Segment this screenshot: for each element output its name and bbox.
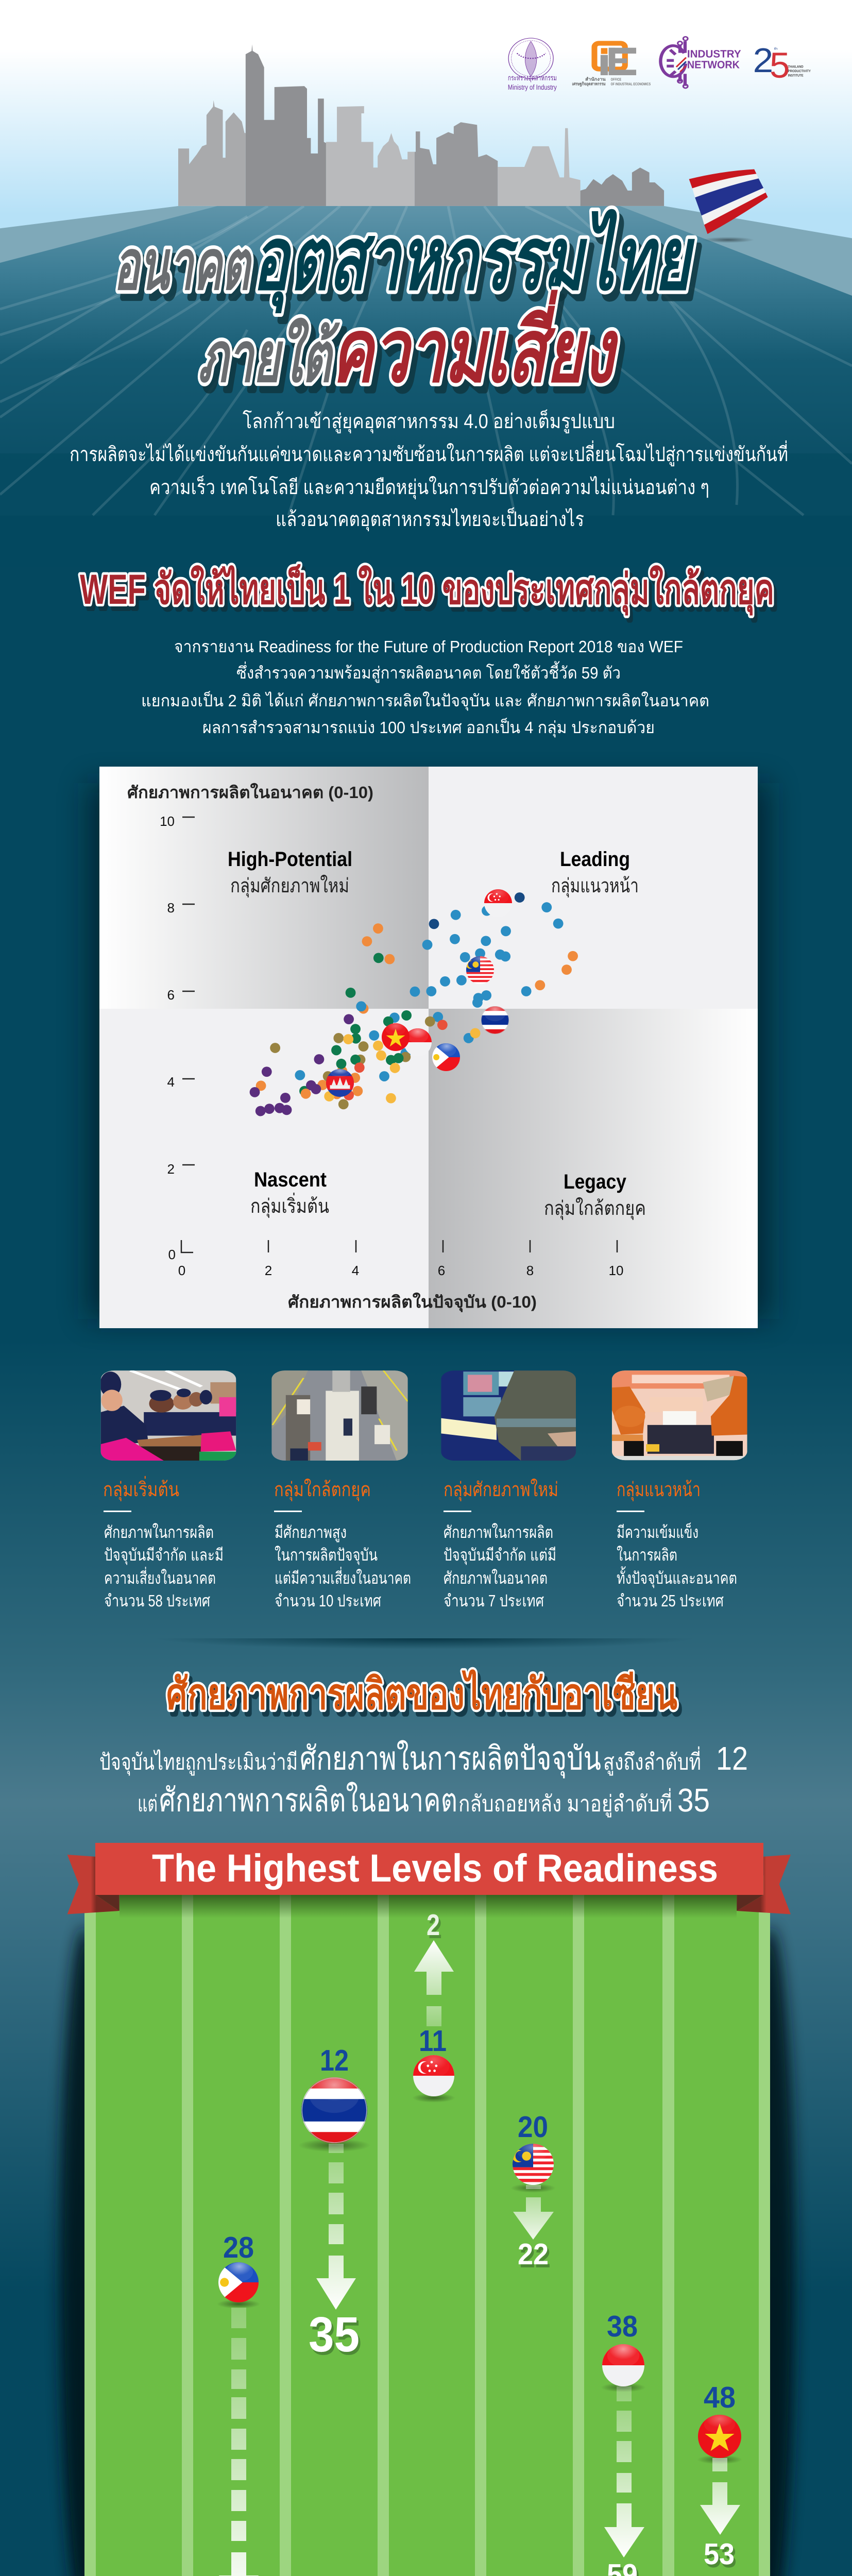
logo: Ministry of Industry seal <box>508 38 553 79</box>
quadrant label: Leading <box>551 848 639 897</box>
logos row: INDUSTRY <box>687 48 741 60</box>
title line 2: ภายใต้ <box>198 317 340 396</box>
flag: Malaysia on chart <box>466 956 494 984</box>
logos row: NETWORK <box>687 59 740 71</box>
logos row: สำนักงาน <box>585 77 606 82</box>
y axis ticks <box>160 814 195 1262</box>
WEF description text: แยกมองเป็น 2 มิติ ได้แก่ ศักยภาพการผลิตในปัจจุบัน และ ศักยภาพการผลิตในอนาคต <box>141 691 709 711</box>
Vietnam rank arrow <box>697 2381 742 2571</box>
group: leading: ทั้งปัจจุบันและอนาคต <box>617 1566 737 1588</box>
group: legacy <box>274 1478 411 1610</box>
y axis ticks: 4 <box>167 1074 175 1090</box>
group: high-potential: ปัจจุบันมีจำกัด แต่มี <box>444 1546 556 1565</box>
y axis ticks: 6 <box>167 987 175 1003</box>
summary text line 1 <box>99 1740 748 1778</box>
quadrant label: Leading: Leading <box>560 848 630 871</box>
group: legacy: จำนวน 10 ประเทศ <box>275 1591 381 1610</box>
intro paragraph: ความเร็ว เทคโนโลยี และความยืดหยุ่นในการปรับตัวต่อความไม่แน่นอนต่าง ๆ <box>149 475 709 500</box>
WEF description text: จากรายงาน Readiness for the Future of Production Report 2018 ของ WEF <box>174 637 683 656</box>
field shadow right <box>745 1927 795 2576</box>
title line 1 <box>114 209 695 313</box>
logos row: 5 <box>770 45 790 86</box>
summary text line 2: กลับถอยหลัง มาอยู่ลำดับที่ <box>458 1788 672 1818</box>
WEF description text <box>141 637 709 738</box>
panel shadow <box>88 783 770 1319</box>
chart quadrants <box>99 767 758 1328</box>
section shadow <box>155 1638 695 1660</box>
x axis title: ศักยภาพการผลิตในปัจจุบัน (0-10) <box>288 1292 537 1312</box>
y axis ticks: 8 <box>167 900 175 916</box>
quadrant label: Nascent <box>250 1168 329 1218</box>
quadrant label: Legacy: กลุ่มใกล้ตกยุค <box>544 1197 646 1220</box>
quadrant label: Legacy <box>544 1171 646 1220</box>
logos row: Ministry of Industry <box>508 83 557 91</box>
intro paragraph: แล้วอนาคตอุตสาหกรรมไทยจะเป็นอย่างไร <box>276 507 584 532</box>
road lines <box>0 206 852 515</box>
Indonesia rank arrow <box>601 2310 646 2576</box>
Singapore rank arrow: 11 <box>419 2024 447 2058</box>
logos row: กระทรวงอุตสาหกรรม <box>508 74 557 82</box>
flag: Indonesia on chart <box>404 1028 432 1056</box>
scatter chart panel <box>99 767 758 1328</box>
group: high-potential: กลุ่มศักยภาพใหม่ <box>444 1478 558 1501</box>
Philippines rank arrow <box>217 2231 260 2576</box>
Vietnam rank arrow: 48 <box>704 2381 736 2414</box>
flag: Vietnam on chart <box>382 1023 410 1051</box>
x axis ticks: 4 <box>352 1263 359 1278</box>
logos row: PRODUCTIVITY <box>788 69 811 73</box>
flag: Cambodia on chart <box>326 1069 354 1097</box>
quadrant label: High-Potential: กลุ่มศักยภาพใหม่ <box>230 874 349 897</box>
logo: TPI 25 years: 2 <box>753 41 773 79</box>
group: nascent: จำนวน 58 ประเทศ <box>104 1591 210 1610</box>
group: nascent: ศักยภาพในการผลิต <box>104 1523 214 1541</box>
photo: engineer with tablet <box>441 1370 576 1461</box>
group: high-potential: ศักยภาพในอนาคต <box>444 1569 548 1587</box>
field lines <box>84 1875 770 2576</box>
flag: Singapore on chart <box>484 889 512 917</box>
logos row: INSTITUTE <box>788 74 804 77</box>
summary text line 1: สูงถึงลำดับที่ <box>603 1746 701 1776</box>
quadrant label: Leading: กลุ่มแนวหน้า <box>551 875 639 897</box>
x axis ticks: 2 <box>265 1263 272 1278</box>
group: legacy: มีศักยภาพสูง <box>275 1523 347 1543</box>
group: high-potential: จำนวน 7 ประเทศ <box>444 1591 544 1610</box>
photo: garment workers <box>100 1370 237 1461</box>
Indonesia rank arrow: 38 <box>607 2310 638 2343</box>
group: nascent: ปัจจุบันมีจำกัด และมี <box>104 1546 224 1565</box>
intro paragraph: โลกก้าวเข้าสู่ยุคอุตสาหกรรม 4.0 อย่างเต็มรูปแบบ <box>243 409 615 434</box>
Vietnam rank arrow: 53 <box>704 2537 735 2571</box>
x axis ticks: 6 <box>438 1263 445 1278</box>
summary text line 1: ปัจจุบันไทยถูกประเมินว่ามี <box>99 1749 298 1776</box>
logos row: th <box>774 47 777 50</box>
x axis ticks <box>178 1240 623 1278</box>
group descriptions <box>103 1476 737 1610</box>
x axis ticks: 10 <box>609 1263 623 1278</box>
Malaysia rank arrow <box>510 2110 556 2271</box>
Singapore rank arrow: 2 <box>427 1908 440 1942</box>
logo: OIE <box>594 43 625 69</box>
summary text line 2 <box>138 1782 710 1819</box>
group: legacy: แต่มีความเสี่ยงในอนาคต <box>275 1567 411 1587</box>
header scene: sky, road and skyline <box>0 0 852 567</box>
y axis ticks: 10 <box>160 814 175 829</box>
group: leading: ในการผลิต <box>617 1546 677 1564</box>
field shadow left <box>60 1927 109 2576</box>
icon: waving Thai flag <box>689 169 768 243</box>
x axis ticks: 0 <box>178 1263 185 1278</box>
title line 1: อนาคต <box>114 226 252 304</box>
heading: Thailand vs ASEAN: ศักยภาพการผลิตของไทยกับอาเซียน <box>166 1669 677 1718</box>
group: leading: มีความเข้มแข็ง <box>617 1522 698 1541</box>
group: nascent: ความเสี่ยงในอนาคต <box>104 1567 216 1587</box>
group: legacy: กลุ่มใกล้ตกยุค <box>274 1478 371 1501</box>
Philippines rank arrow: 28 <box>223 2231 254 2264</box>
quadrant label: Legacy: Legacy <box>564 1171 627 1193</box>
group: high-potential: ศักยภาพในการผลิต <box>444 1523 553 1541</box>
quadrant label: Nascent: กลุ่มเริ่มต้น <box>250 1192 329 1218</box>
summary text line 1: ศักยภาพในการผลิตปัจจุบัน <box>300 1740 601 1778</box>
y axis title: ศักยภาพการผลิตในอนาคต (0-10) <box>127 783 373 802</box>
quadrant label: High-Potential <box>228 848 352 897</box>
title line 2 <box>198 290 619 400</box>
summary text line 2: ศักยภาพการผลิตในอนาคต <box>159 1782 457 1819</box>
photo: factory floor <box>271 1370 408 1461</box>
logo: Industry Network <box>660 41 686 86</box>
flag: Thailand on chart <box>481 1006 509 1034</box>
group: legacy: ในการผลิตปัจจุบัน <box>275 1546 378 1565</box>
banner <box>67 1843 791 1914</box>
banner title: The Highest Levels of Readiness <box>152 1846 718 1890</box>
group: nascent: กลุ่มเริ่มต้น <box>103 1476 179 1501</box>
Malaysia rank arrow: 20 <box>518 2110 548 2144</box>
group: leading <box>617 1479 737 1610</box>
scatter points <box>250 892 578 1116</box>
Malaysia rank arrow: 22 <box>518 2238 549 2271</box>
photo cards row <box>100 1370 747 1461</box>
WEF description text: ผลการสำรวจสามารถแบ่ง 100 ประเทศ ออกเป็น 4 กลุ่ม ประกอบด้วย <box>202 718 655 738</box>
Singapore rank arrow <box>412 1908 455 2103</box>
summary text line 1: 12 <box>716 1740 748 1777</box>
flag: Philippines on chart <box>432 1043 460 1071</box>
Thailand rank arrow <box>298 2044 370 2362</box>
logos row <box>508 37 811 91</box>
logos row: OF INDUSTRIAL ECONOMICS <box>611 82 651 86</box>
photo: robot arms <box>612 1370 747 1460</box>
x axis ticks: 8 <box>526 1263 534 1278</box>
group: nascent <box>103 1476 224 1610</box>
quadrant label: High-Potential: High-Potential <box>228 848 352 871</box>
quadrant label: Nascent: Nascent <box>254 1168 327 1191</box>
Thailand rank arrow: 35 <box>309 2307 360 2362</box>
logos row: OFFICE <box>611 77 621 81</box>
group: leading: จำนวน 25 ประเทศ <box>617 1591 724 1610</box>
y axis ticks: 0 <box>168 1247 176 1262</box>
title line 2: ความเสี่ยง <box>331 290 619 400</box>
y axis ticks: 2 <box>167 1161 175 1177</box>
summary text line 2: แต่ <box>138 1791 158 1817</box>
logos row: THAILAND <box>788 65 804 69</box>
summary text line 2: 35 <box>677 1782 710 1819</box>
Thailand rank arrow: 12 <box>320 2044 349 2077</box>
skyline <box>178 44 664 206</box>
WEF description text: ซึ่งสำรวจความพร้อมสู่การผลิตอนาคต โดยใช้ตัวชี้วัด 59 ตัว <box>236 661 621 683</box>
logos row: เศรษฐกิจอุตสาหกรรม <box>572 81 606 87</box>
intro paragraph <box>70 409 788 532</box>
football field <box>84 1875 770 2576</box>
group: leading: กลุ่มแนวหน้า <box>617 1479 701 1501</box>
group: high-potential <box>444 1478 558 1610</box>
